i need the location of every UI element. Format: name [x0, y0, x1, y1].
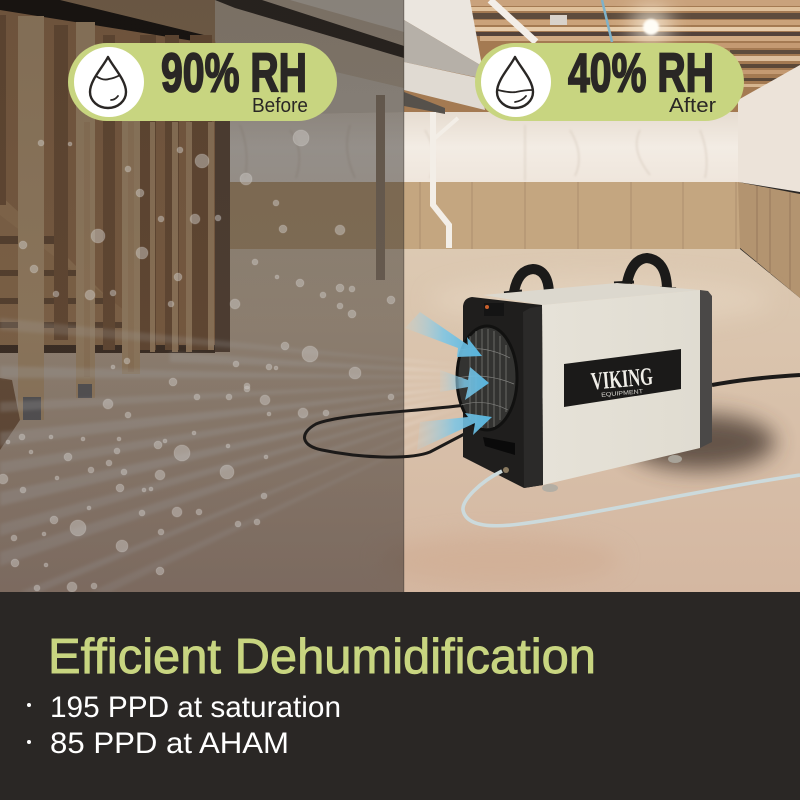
arrow bottom	[417, 413, 492, 450]
logo plate	[564, 349, 681, 407]
divider edge	[403, 0, 404, 592]
control panel	[484, 303, 504, 316]
arrow top	[405, 312, 482, 357]
fan grille	[457, 326, 517, 430]
dehumidifier unit	[457, 258, 712, 492]
icon: water drop low	[481, 47, 551, 117]
after badge	[475, 42, 744, 121]
back wall lower panels	[225, 182, 740, 249]
ceiling joists	[0, 0, 800, 125]
drain hose	[463, 471, 800, 526]
drain fitting	[503, 467, 509, 473]
side panel	[542, 290, 700, 485]
before badge	[68, 42, 337, 121]
caption: Before	[252, 95, 308, 117]
right side wall	[738, 65, 800, 192]
ceiling pipes and light	[490, 0, 671, 46]
handles	[504, 258, 676, 302]
bullet list	[27, 691, 341, 760]
dehumidifier shadow	[625, 414, 775, 470]
pill	[68, 43, 337, 121]
bullet two: 85 PPD at AHAM	[50, 727, 289, 760]
moisture droplets	[0, 130, 395, 592]
basement photo background	[0, 0, 800, 592]
lower vent	[483, 437, 515, 455]
wood wall framing	[0, 0, 215, 450]
icon: water drop high	[74, 47, 144, 117]
drain pipe	[433, 112, 458, 248]
airflow arrows	[405, 312, 492, 450]
bullet one: 195 PPD at saturation	[50, 691, 341, 724]
power cord	[305, 375, 800, 457]
bottom text panel	[0, 592, 800, 800]
arrow middle	[440, 367, 489, 400]
pill	[475, 43, 744, 121]
back wall insulation	[225, 112, 740, 182]
value: 90% RH	[161, 42, 307, 104]
front black housing	[463, 297, 543, 488]
light floor patches	[380, 275, 770, 585]
dark before overlay	[0, 0, 404, 592]
insulation folds	[240, 125, 707, 181]
value: 40% RH	[568, 42, 714, 104]
rear end cap	[700, 290, 712, 448]
top panel	[483, 283, 700, 305]
floor	[0, 249, 800, 592]
feet	[542, 455, 682, 492]
logo plate: EQUIPMENT	[601, 389, 644, 399]
ductwork	[215, 0, 485, 115]
caption: After	[669, 95, 716, 117]
steel support post	[212, 95, 385, 352]
heading: Efficient Dehumidification	[48, 630, 596, 684]
air stream fan	[0, 318, 470, 592]
logo text: VIKING	[590, 363, 654, 396]
